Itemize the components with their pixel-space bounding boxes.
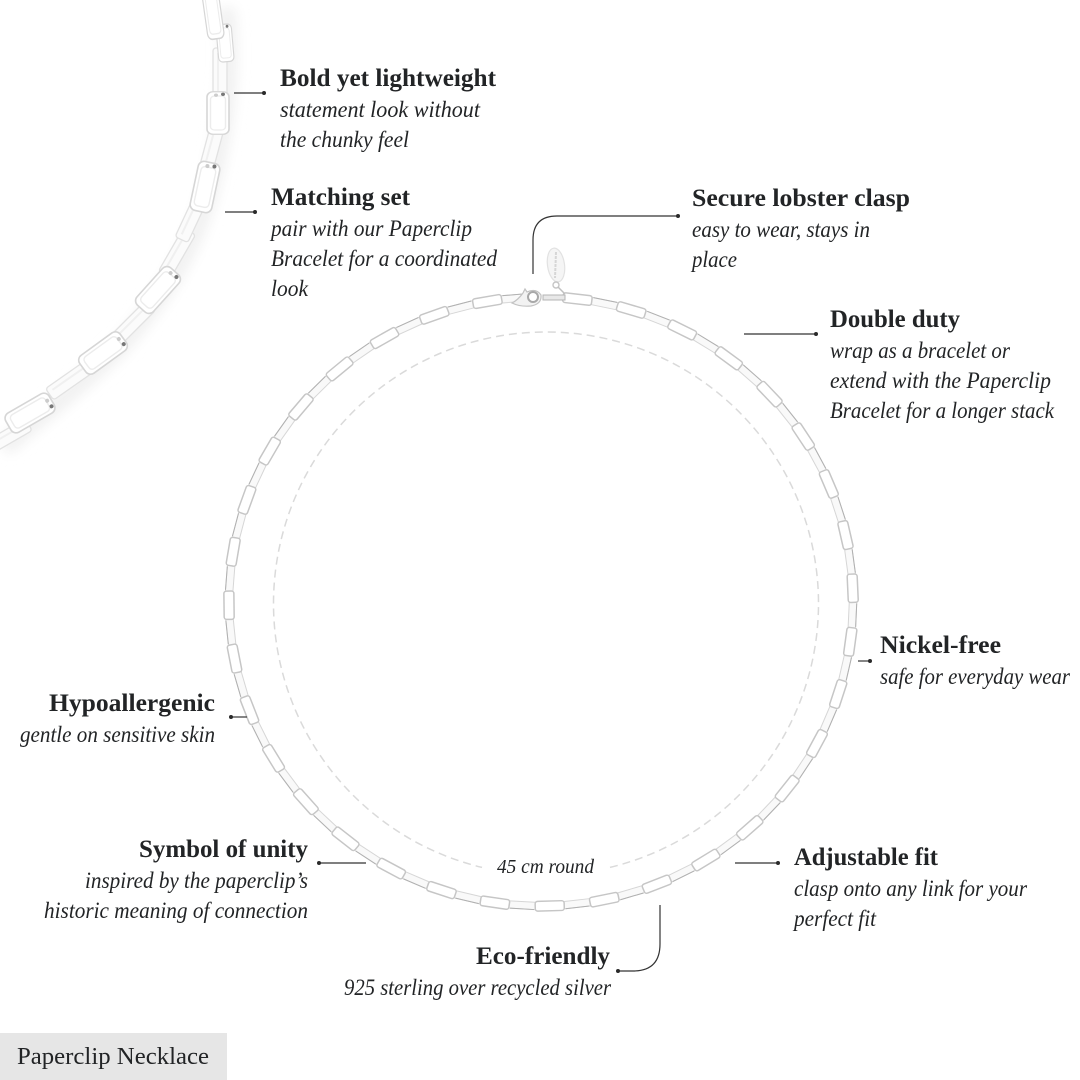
callout: secure lobster clasp bbox=[533, 185, 910, 274]
callout: adjustable fit: Adjustable fit bbox=[794, 844, 939, 871]
product name tag bbox=[0, 1033, 227, 1080]
callout: hypoallergenic: gentle on sensitive skin bbox=[20, 722, 215, 747]
callout: eco-friendly bbox=[344, 905, 660, 1000]
callout: matching set: Matching set bbox=[271, 184, 411, 211]
callout: matching set bbox=[225, 184, 497, 301]
callout: symbol of unity: historic meaning of connection bbox=[44, 898, 308, 923]
callout: secure lobster clasp: Secure lobster clasp bbox=[692, 185, 910, 212]
callout: double duty: wrap as a bracelet or bbox=[830, 338, 1011, 363]
callout: nickel-free: Nickel-free bbox=[880, 632, 1001, 659]
close-up chain detail bbox=[0, 0, 234, 456]
callout: double duty bbox=[744, 306, 1055, 423]
necklace chain bbox=[222, 290, 860, 913]
callout: adjustable fit: perfect fit bbox=[792, 906, 877, 931]
callout: hypoallergenic bbox=[20, 690, 247, 747]
callout: double duty: extend with the Paperclip bbox=[830, 368, 1051, 393]
size label: 45 cm round bbox=[497, 856, 595, 878]
callout: bold yet lightweight: Bold yet lightweight bbox=[280, 65, 497, 92]
callout: adjustable fit: clasp onto any link for your bbox=[794, 876, 1028, 901]
callout: bold yet lightweight bbox=[234, 65, 497, 152]
callout: symbol of unity: inspired by the paperclip’s bbox=[85, 868, 308, 893]
callout: secure lobster clasp: easy to wear, stays in bbox=[692, 217, 870, 242]
dashed 45 cm circle bbox=[274, 332, 818, 867]
product name tag: Paperclip Necklace bbox=[17, 1044, 209, 1070]
callout: matching set: Bracelet for a coordinated bbox=[271, 246, 497, 271]
callout: matching set: look bbox=[271, 276, 309, 301]
callout: symbol of unity: Symbol of unity bbox=[139, 836, 308, 863]
lobster clasp and tag bbox=[512, 247, 567, 306]
callout: double duty: Bracelet for a longer stack bbox=[830, 398, 1055, 423]
callout: double duty: Double duty bbox=[830, 306, 960, 333]
callout: secure lobster clasp: place bbox=[690, 247, 737, 272]
callout: symbol of unity bbox=[44, 836, 366, 923]
callout: matching set: pair with our Paperclip bbox=[269, 216, 472, 241]
callout: adjustable fit bbox=[735, 844, 1028, 931]
callout: eco-friendly: Eco-friendly bbox=[476, 943, 610, 970]
callout: nickel-free bbox=[858, 632, 1071, 689]
callout: bold yet lightweight: the chunky feel bbox=[280, 127, 409, 152]
callout: bold yet lightweight: statement look without bbox=[280, 97, 481, 122]
callout: eco-friendly: 925 sterling over recycled silver bbox=[344, 975, 612, 1000]
callout: hypoallergenic: Hypoallergenic bbox=[49, 690, 215, 717]
